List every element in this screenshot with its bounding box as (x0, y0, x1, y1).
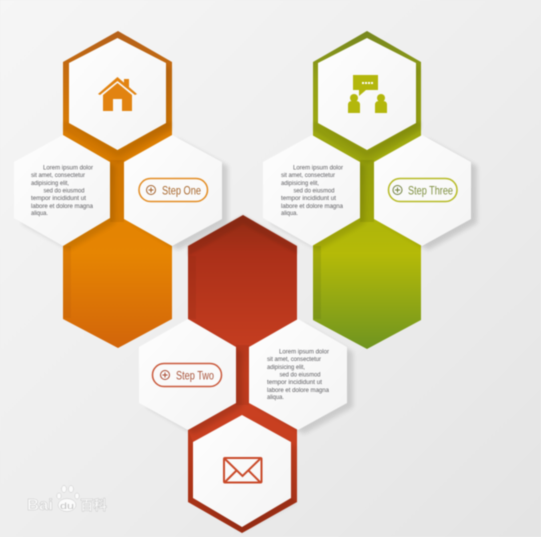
panel: envelope hexagon (193, 415, 291, 527)
text block: sit amet, consectetur (281, 172, 336, 179)
panel: step one hexagon (124, 135, 222, 246)
text block: sit amet, consectetur (31, 172, 86, 179)
button: step three: Step Three (408, 183, 453, 197)
panel: orange step one column (63, 31, 172, 348)
watermark: Baidu Baike: du (60, 501, 74, 511)
panel: green text hexagon (263, 135, 360, 246)
text block: Lorem ipsum dolor (279, 348, 330, 356)
text block: Lorem ipsum dolor (43, 164, 94, 172)
text block: aliqua. (281, 210, 298, 217)
text block: sit amet, consectetur (267, 356, 322, 363)
text block: Lorem ipsum dolor (293, 164, 344, 172)
panel: step two hexagon (139, 319, 236, 430)
watermark: Baidu Baike: Bai (27, 497, 53, 514)
text block: adipisicing elit, (267, 364, 305, 371)
panel: orange text hexagon (14, 135, 110, 246)
text block: labore et dolore magna (267, 387, 329, 394)
text block (267, 348, 330, 401)
panel: red step two column (188, 215, 297, 533)
text block: aliqua. (267, 394, 284, 401)
icon: two people talking (348, 75, 387, 113)
text block: adipisicing elit, (281, 180, 319, 187)
panel: red text hexagon (249, 319, 347, 430)
text block: adipisicing elit, (31, 180, 69, 187)
text block: sed do eiusmod (280, 372, 321, 378)
shadows under white hexagons (22, 41, 477, 531)
text block: tempor incididunt ut (31, 195, 86, 202)
text block: tempor incididunt ut (267, 379, 322, 386)
icon: envelope (224, 458, 262, 482)
panel: chat hexagon (318, 38, 416, 150)
text block: labore et dolore magna (31, 203, 93, 210)
panel: green step three column (313, 31, 421, 349)
text block (281, 164, 344, 217)
icon: house (98, 77, 137, 111)
panel: step three hexagon (374, 135, 471, 246)
text block: sed do eiusmod (294, 188, 335, 194)
text block: labore et dolore magna (281, 203, 343, 210)
button: step two: Step Two (176, 368, 214, 382)
watermark: Baidu Baike: 百科 (80, 497, 107, 513)
text block: tempor incididunt ut (281, 195, 336, 202)
watermark: Baidu Baike (27, 486, 107, 514)
button: step one: Step One (162, 183, 201, 197)
panel: house hexagon (69, 38, 166, 150)
text block: aliqua. (31, 210, 48, 217)
text block: sed do eiusmod (44, 188, 85, 194)
text block (31, 164, 94, 217)
